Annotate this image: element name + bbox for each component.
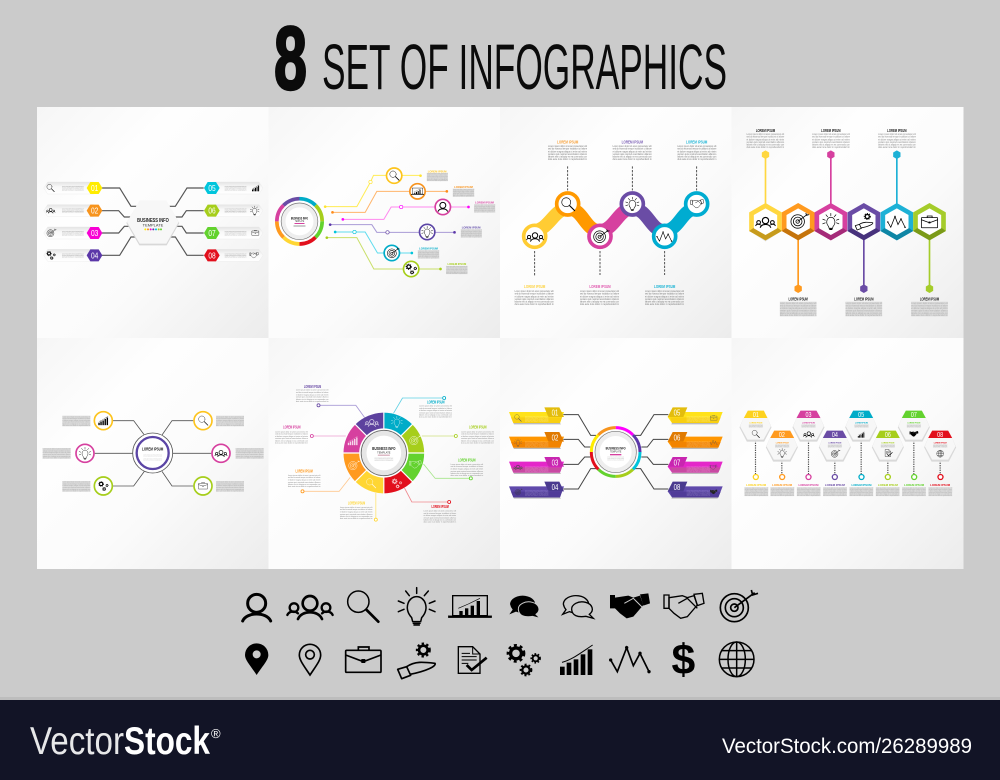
number badges: 04 xyxy=(91,251,99,260)
text blocks: LOREM IPSUM xyxy=(458,457,476,462)
number badges: 02 xyxy=(91,207,99,216)
number badges: 07 xyxy=(208,229,216,238)
right ribbons: 07 xyxy=(674,458,681,467)
donut segments xyxy=(340,410,427,496)
text blocks xyxy=(275,384,494,524)
orange line and laptop node: LOREM IPSUM xyxy=(454,185,474,189)
captions: LOREM IPSUM xyxy=(746,483,767,487)
right ribbons: 05 xyxy=(674,409,681,418)
dashed stems and dots xyxy=(753,438,943,479)
icon: outline handshake xyxy=(664,593,704,618)
central ring: BUSINESS INFO xyxy=(291,216,308,220)
hexagon cards: LOREM IPSUM xyxy=(907,422,921,424)
panel: staggered hexagon cards with timeline xyxy=(732,338,963,569)
number badges: 06 xyxy=(208,207,216,216)
left bars xyxy=(44,182,94,261)
centre disc: TEMPLATE xyxy=(377,450,391,454)
purple line and bulb node xyxy=(329,223,482,240)
text blocks: LOREM IPSUM xyxy=(788,296,808,301)
connector lines xyxy=(563,415,668,489)
title: 8 xyxy=(274,9,307,109)
number badges: 01 xyxy=(91,184,99,193)
panel: ring with circuit lines xyxy=(268,107,500,338)
leader lines xyxy=(301,396,472,521)
icon: outline chat bubbles xyxy=(563,596,593,618)
cyan line and target node: LOREM IPSUM xyxy=(419,246,439,250)
panel: segmented donut xyxy=(268,338,500,569)
captions xyxy=(744,483,953,497)
central ring xyxy=(277,199,322,244)
hexagon cards: 07 xyxy=(911,410,917,419)
left ribbons xyxy=(509,407,564,499)
text blocks: LOREM IPSUM xyxy=(295,469,313,474)
number badges xyxy=(87,182,220,261)
text blocks: LOREM IPSUM xyxy=(304,384,321,389)
centre hexagon: BUSINESS INFO xyxy=(137,218,169,224)
left ribbons: 04 xyxy=(552,483,559,492)
hexagon cards: LOREM IPSUM xyxy=(828,442,842,444)
icon: hand with gear xyxy=(398,644,435,679)
lime line and gears node: LOREM IPSUM xyxy=(447,262,467,266)
circle nodes with icons xyxy=(524,193,708,247)
hexagon cards: 03 xyxy=(805,410,811,419)
footer logo: ® xyxy=(211,726,221,741)
hexagon cards: LOREM IPSUM xyxy=(855,422,868,424)
number badges: 08 xyxy=(208,251,216,260)
hexagon cards: LOREM IPSUM xyxy=(934,442,947,444)
icon: search xyxy=(348,591,378,622)
icon: gears xyxy=(508,645,540,675)
purple line and bulb node: LOREM IPSUM xyxy=(462,226,481,230)
text blocks: LOREM IPSUM xyxy=(920,296,939,301)
lime line and gears node xyxy=(325,236,468,277)
text blocks: LOREM IPSUM xyxy=(427,400,445,405)
right ribbons: 06 xyxy=(674,433,681,442)
footer logo: Vector xyxy=(30,720,124,763)
dashed leaders xyxy=(535,166,697,276)
ribbon connectors xyxy=(533,209,697,231)
icon: solid handshake xyxy=(610,593,650,618)
captions: LOREM IPSUM xyxy=(799,483,819,487)
text blocks: LOREM IPSUM xyxy=(887,128,907,133)
cyan line and target node xyxy=(334,230,440,261)
footer logo: Stock xyxy=(124,720,210,763)
left ribbons: 02 xyxy=(552,433,559,442)
right ribbons: 08 xyxy=(674,483,681,492)
icon: laptop chart xyxy=(448,596,492,618)
icon: document check xyxy=(458,647,487,673)
hexagon cards: LOREM IPSUM xyxy=(749,422,763,424)
icon: outline pin xyxy=(299,644,321,675)
hexagon cards: LOREM IPSUM xyxy=(802,422,815,424)
hexagon cards: 08 xyxy=(937,430,943,439)
icon: target xyxy=(720,590,758,622)
icon row right half xyxy=(508,590,758,684)
icon: zigzag line xyxy=(609,646,651,673)
central ring: TEMPLATE xyxy=(295,220,305,223)
text blocks xyxy=(746,128,948,317)
stems and end nodes xyxy=(762,150,933,293)
captions: LOREM IPSUM xyxy=(878,483,898,487)
text blocks: LOREM IPSUM xyxy=(283,425,301,430)
panel: ring with eight ribbons xyxy=(500,338,732,569)
centre ring: BUSINESS INFO xyxy=(606,446,626,451)
icon: user xyxy=(243,594,271,621)
hexagon cards: 02 xyxy=(779,430,785,439)
text blocks xyxy=(515,139,717,306)
centre disc: BUSINESS INFO xyxy=(372,446,396,451)
centre ring: TEMPLATE xyxy=(610,450,622,454)
number badges: 05 xyxy=(208,184,216,193)
text blocks: LOREM IPSUM xyxy=(469,425,487,430)
text blocks: LOREM IPSUM xyxy=(524,284,545,290)
centre hexagon xyxy=(126,200,179,245)
icon: light bulb xyxy=(398,588,435,625)
icon: briefcase xyxy=(346,647,381,672)
title xyxy=(274,9,727,109)
number badges: 03 xyxy=(91,229,99,238)
text blocks: LOREM IPSUM xyxy=(854,296,874,301)
yellow line and search node: LOREM IPSUM xyxy=(428,169,447,173)
captions: LOREM IPSUM xyxy=(852,483,872,487)
icon: dollar: $ xyxy=(671,636,695,684)
magenta line and user node: LOREM IPSUM xyxy=(475,201,495,205)
footer logo xyxy=(30,720,221,763)
left ribbons: 01 xyxy=(552,409,559,418)
segment icons xyxy=(348,416,421,488)
hexagon cards: LOREM IPSUM xyxy=(881,442,895,444)
hexagons with icons xyxy=(749,203,946,241)
icon: solid pin xyxy=(245,643,268,675)
orange line and laptop node xyxy=(331,184,475,214)
satellite circles with icons xyxy=(76,412,230,495)
right ribbons xyxy=(668,407,723,499)
hexagon cards: 01 xyxy=(753,410,759,419)
connector lines xyxy=(102,188,204,255)
footer bar xyxy=(0,697,1000,780)
icon row left half xyxy=(243,588,492,679)
footer image id: VectorStock.com/26289989 xyxy=(722,735,972,758)
text blocks: LOREM IPSUM xyxy=(686,139,707,145)
captions: LOREM IPSUM xyxy=(772,483,793,487)
right bars xyxy=(214,182,263,261)
text blocks: LOREM IPSUM xyxy=(622,139,643,145)
text blocks: LOREM IPSUM xyxy=(589,284,611,290)
text blocks: LOREM IPSUM xyxy=(756,128,775,133)
text blocks: LOREM IPSUM xyxy=(654,284,675,290)
captions: LOREM IPSUM xyxy=(904,483,925,487)
panel: hexagon hub with eight numbered bars xyxy=(37,107,269,338)
central hub xyxy=(133,433,173,473)
icon: team xyxy=(287,596,333,619)
hexagon cards: 05 xyxy=(858,410,864,419)
spoke lines xyxy=(95,421,211,486)
magenta line and user node xyxy=(341,199,496,221)
left ribbons: 03 xyxy=(552,458,559,467)
text blocks: LOREM IPSUM xyxy=(821,128,841,133)
panel: hexagon row timeline xyxy=(732,107,963,338)
panel: chain of linked circles xyxy=(500,107,732,338)
hexagon cards xyxy=(739,410,956,462)
centre hexagon: TEMPLATE xyxy=(143,223,164,227)
yellow line and search node xyxy=(324,168,448,208)
centre ring xyxy=(591,428,640,476)
central hub: LOREM IPSUM xyxy=(142,446,163,451)
captions: LOREM IPSUM xyxy=(930,483,951,487)
captions: LOREM IPSUM xyxy=(825,483,845,487)
centre disc xyxy=(359,428,408,478)
text blocks: LOREM IPSUM xyxy=(348,500,365,505)
panel: purple hub with six satellites xyxy=(37,338,269,569)
text blocks xyxy=(43,415,264,492)
icon: solid chat bubbles xyxy=(509,596,540,618)
icon: globe xyxy=(719,642,754,677)
hexagon cards: 04 xyxy=(832,430,838,439)
text blocks: LOREM IPSUM xyxy=(431,504,449,509)
hexagon cards: 06 xyxy=(885,430,891,439)
icon: bar chart xyxy=(560,645,593,675)
text blocks: LOREM IPSUM xyxy=(557,139,578,145)
hexagon cards: LOREM IPSUM xyxy=(776,442,789,444)
